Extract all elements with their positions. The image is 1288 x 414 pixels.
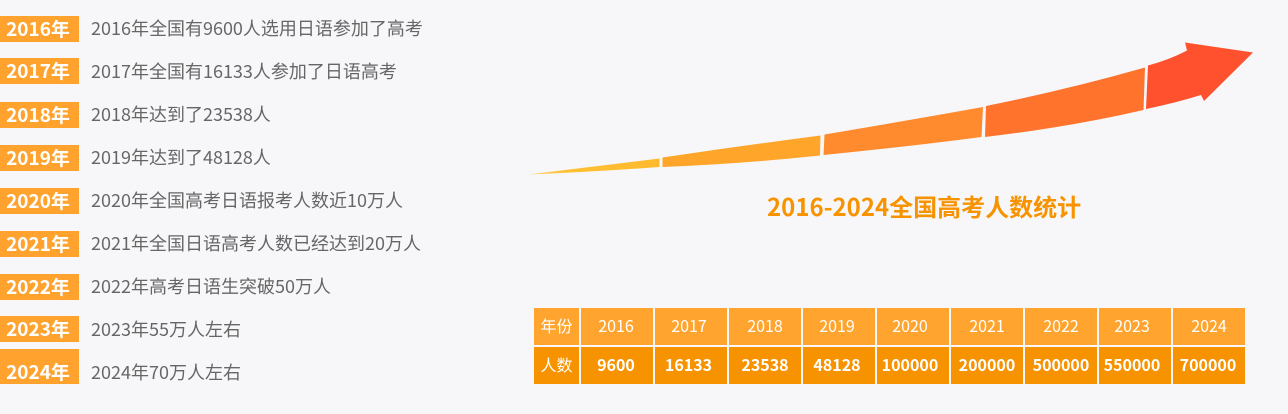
row: years: 2024 <box>1191 313 1227 337</box>
text: 2019: 2019年达到了48128人 <box>91 144 271 170</box>
badge: 2024: 2024年 <box>6 358 70 385</box>
badge: 2017: 2017年 <box>6 57 70 84</box>
text: 2023: 2023年55万人左右 <box>91 316 241 342</box>
segment 3 <box>824 107 983 155</box>
row: years: 2019 <box>819 313 855 337</box>
badge: 2024 <box>0 349 79 384</box>
row: counts: 23538 <box>741 352 789 376</box>
row: years: 2021 <box>969 313 1005 337</box>
text: 2024: 2024年70万人左右 <box>91 359 241 385</box>
row: years: 2018 <box>747 313 783 337</box>
text: 2018: 2018年达到了23538人 <box>91 101 271 127</box>
row: counts: 48128 <box>813 352 861 376</box>
badge: 2022: 2022年 <box>6 273 70 300</box>
row: counts: 人数 <box>540 352 572 376</box>
row: years: 年份 <box>540 313 572 337</box>
row: counts: 550000 <box>1104 352 1160 376</box>
growth arrow <box>529 42 1253 174</box>
text: 2016: 2016年全国有9600人选用日语参加了高考 <box>91 15 423 41</box>
text: 2021: 2021年全国日语高考人数已经达到20万人 <box>91 230 421 256</box>
chart title: 2016-2024全国高考人数统计 <box>767 188 1081 223</box>
badge: 2023: 2023年 <box>6 315 70 342</box>
row: counts: 700000 <box>1180 352 1236 376</box>
badge: 2021: 2021年 <box>6 230 70 257</box>
badge: 2019: 2019年 <box>6 144 70 171</box>
text: 2022: 2022年高考日语生突破50万人 <box>91 273 331 299</box>
text: 2020: 2020年全国高考日语报考人数近10万人 <box>91 187 403 213</box>
row: years: 2017 <box>671 313 707 337</box>
segment 4 <box>985 68 1145 137</box>
badge: 2020: 2020年 <box>6 187 70 214</box>
segment 2 <box>662 136 820 167</box>
badge: 2016: 2016年 <box>6 15 70 42</box>
row: counts: 9600 <box>597 352 635 376</box>
row: years: 2023 <box>1114 313 1150 337</box>
timeline list <box>0 15 423 385</box>
row: counts: 100000 <box>882 352 938 376</box>
badge: 2018: 2018年 <box>6 101 70 128</box>
text: 2017: 2017年全国有16133人参加了日语高考 <box>91 58 397 84</box>
row: years: 2020 <box>892 313 928 337</box>
row: years: 2022 <box>1043 313 1079 337</box>
row: years: 2016 <box>598 313 634 337</box>
row: counts: 500000 <box>1033 352 1089 376</box>
segment 5 <box>1146 42 1253 109</box>
row: counts: 16133 <box>665 352 712 376</box>
data table <box>534 308 1245 384</box>
row: counts: 200000 <box>959 352 1015 376</box>
segment 1 <box>528 158 660 174</box>
